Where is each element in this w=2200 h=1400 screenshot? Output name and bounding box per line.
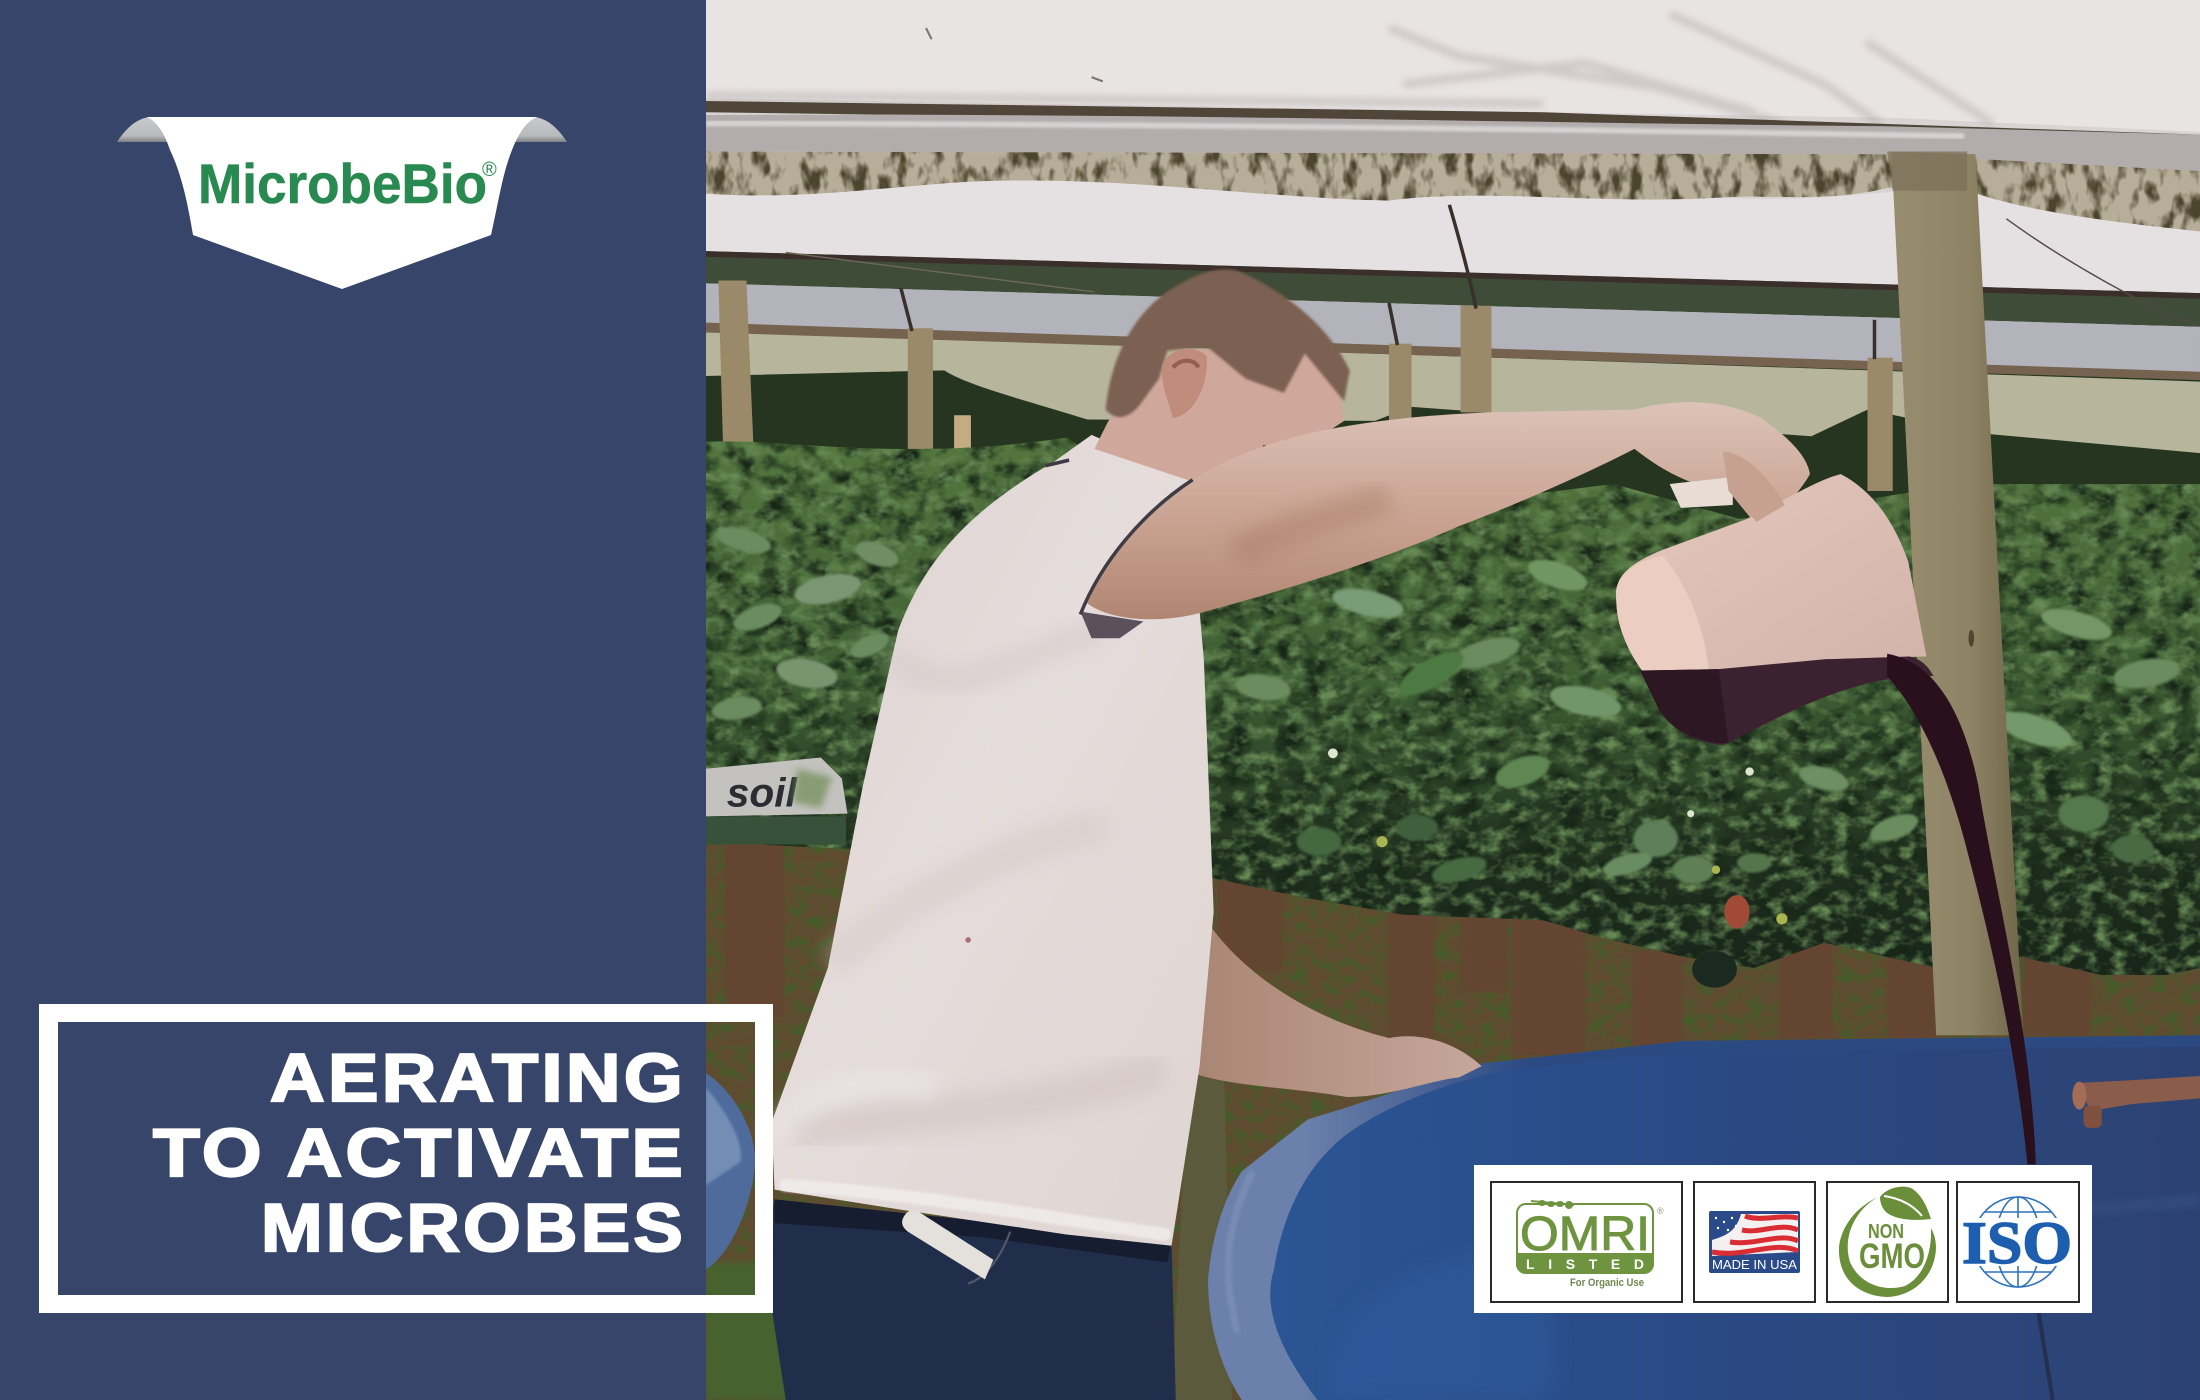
badge: non GMO: GMO	[1859, 1237, 1925, 1276]
registered mark: ®	[482, 159, 497, 181]
title text: MICROBES	[261, 1190, 686, 1266]
wooden planter supports	[725, 842, 2091, 1055]
fingers gripping the jug handle	[1723, 452, 1785, 522]
neck and face	[1094, 344, 1344, 484]
strip background	[1474, 1165, 2092, 1313]
background: sky-coloured tarp base and dark hedge behind greenhouse	[706, 0, 2200, 519]
brown rail	[706, 323, 2200, 380]
background tub fragment at left	[706, 1073, 755, 1270]
copper pipe on tank	[2072, 1076, 2200, 1128]
lower arm and hand on rim	[1193, 912, 1482, 1097]
certification badges strip	[1474, 1165, 2092, 1313]
strawberry foliage	[706, 435, 2200, 975]
pocket tube	[902, 1210, 993, 1279]
fence post in front of ground	[1172, 1045, 1232, 1400]
badge: OMRI listed: LISTED	[1526, 1256, 1644, 1272]
background wooden posts	[718, 281, 1893, 513]
moss-stained valance	[706, 147, 2200, 234]
badge: made in USA: MADE IN USA	[1712, 1257, 1797, 1272]
badge: OMRI listed: ®	[1657, 1206, 1664, 1216]
raised arm and hand	[1087, 402, 1810, 619]
dark roof edge	[706, 101, 2200, 146]
left navy panel	[0, 0, 706, 1400]
title text: TO ACTIVATE	[153, 1115, 686, 1191]
badge: OMRI listed: OMRI	[1520, 1208, 1650, 1261]
title box	[39, 1004, 773, 1313]
upper white tarp	[706, 0, 2200, 132]
dark green beam	[706, 251, 2200, 327]
badge: made in USA	[1694, 1182, 1815, 1302]
logo ribbon	[117, 117, 567, 289]
large wooden greenhouse post	[1887, 152, 2023, 1035]
hair	[1106, 269, 1350, 417]
ground	[706, 828, 2200, 1400]
logo wordmark: MicrobeBio	[198, 152, 487, 215]
planting bag with soil label: soil	[727, 770, 798, 816]
strawberry fruit	[1724, 895, 1750, 929]
badge: non GMO	[1827, 1182, 1948, 1302]
badge: non GMO: NON	[1868, 1221, 1904, 1243]
eye crease	[1263, 446, 1288, 457]
badge: OMRI listed: For Organic Use	[1570, 1277, 1644, 1289]
measuring jug with dark liquid	[1616, 474, 1933, 745]
blue tank	[1208, 1035, 2200, 1400]
photo: man pouring liquid into a tank in a strawberry greenhouse	[706, 0, 2200, 1400]
liquid stream	[1887, 654, 2036, 1164]
dangling dark leaf	[1692, 951, 1737, 988]
white polo shirt	[772, 435, 1214, 1246]
title text	[153, 1040, 686, 1266]
grey plastic curtain	[706, 283, 2200, 379]
roof tube	[706, 115, 2200, 173]
man	[765, 269, 1810, 1400]
collar shadow	[1045, 460, 1069, 466]
lower white tarp	[706, 181, 2200, 295]
ribbon body	[147, 117, 537, 289]
ear	[1162, 349, 1207, 418]
badge: OMRI listed	[1491, 1182, 1682, 1302]
title frame	[39, 1004, 773, 1313]
ribbon folds	[117, 117, 172, 142]
badge: ISO	[1957, 1182, 2079, 1302]
sleeve lining	[1080, 612, 1143, 638]
yellowed lower plastic	[706, 331, 2200, 453]
title text: AERATING	[270, 1040, 686, 1116]
planting bag with soil label	[706, 758, 847, 844]
jeans	[765, 1199, 1176, 1400]
badge: ISO: ISO	[1962, 1210, 2072, 1276]
